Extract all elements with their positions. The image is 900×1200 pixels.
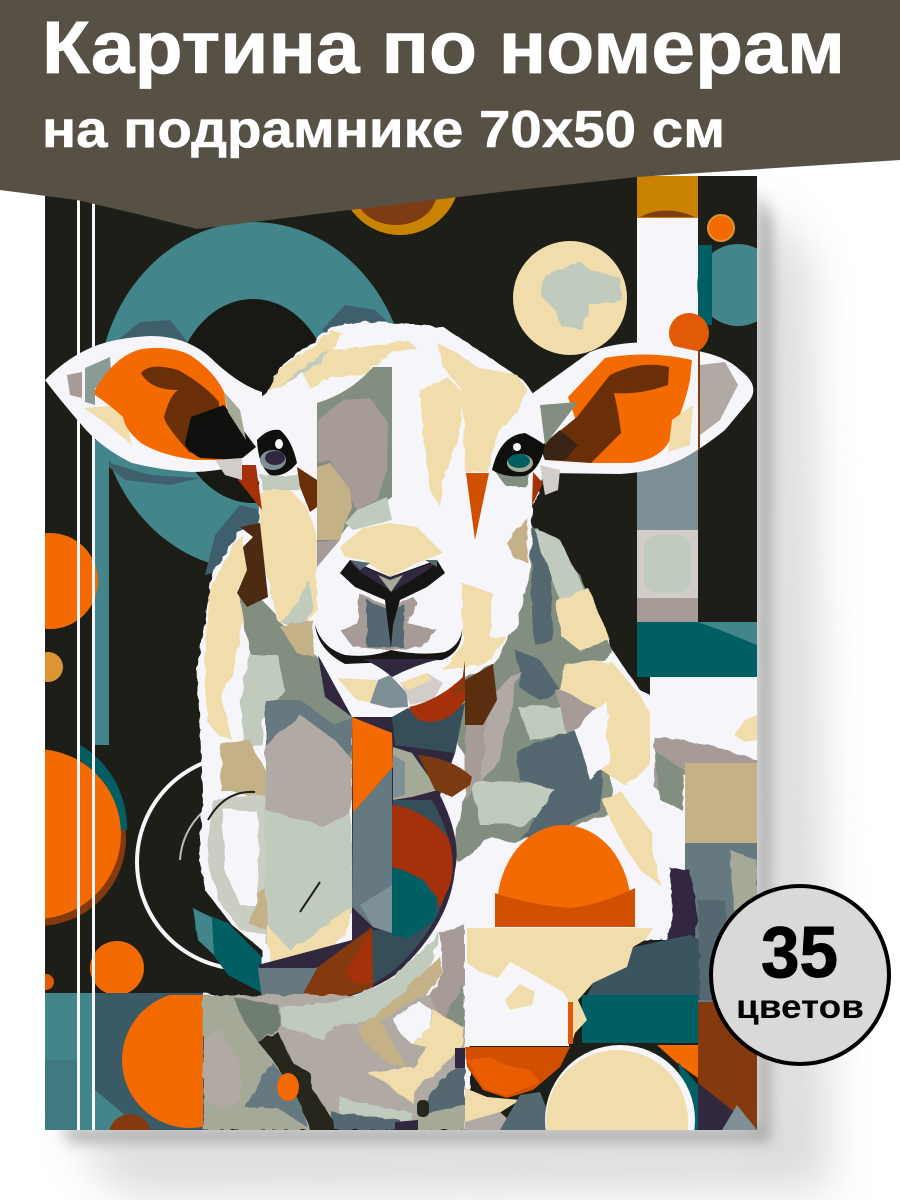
badge: 35 colours [711, 886, 889, 1064]
badge: 35 colours: цветов [736, 988, 864, 1025]
sheep head [237, 322, 545, 725]
head base [256, 320, 544, 684]
center geometric circle [258, 655, 472, 1005]
badge: 35 colours: 35 [761, 913, 838, 993]
canvas shadow [60, 190, 830, 1195]
face patches [260, 330, 530, 670]
right wool patches [452, 525, 662, 885]
right column blocks [637, 176, 757, 677]
left circles [45, 440, 144, 993]
orange egg [495, 825, 635, 927]
panel: painting [45, 176, 757, 1130]
right lower geometry [582, 677, 757, 1130]
title line 1: Картина по номерам [42, 6, 845, 89]
teal ring [98, 222, 408, 575]
red marks [238, 465, 262, 510]
right eye [492, 433, 545, 476]
orange half ellipse [465, 1047, 570, 1130]
bottom band left [45, 993, 207, 1130]
title line 2: на подрамнике 70х50 см [42, 101, 725, 159]
black squiggle [258, 1032, 335, 1130]
mouth [315, 625, 462, 677]
cream circle bottom [545, 1045, 698, 1130]
cream cup [465, 928, 653, 1046]
left eye [257, 430, 297, 476]
teal blob lower left [193, 908, 262, 993]
left ear [45, 336, 262, 480]
nose bridge cream [340, 523, 443, 577]
left cheek brown [237, 523, 268, 607]
wool white base [197, 527, 690, 1130]
sheep body wool [197, 525, 690, 1130]
white square [465, 950, 569, 1046]
top ochre circle [351, 197, 456, 235]
cream circle [513, 241, 627, 355]
eyes [257, 430, 545, 476]
header banner [0, 0, 900, 229]
left wool patches [205, 534, 352, 965]
tiny orange leaf [277, 1073, 299, 1101]
chin [337, 660, 497, 725]
small circles right [669, 214, 757, 351]
bottom wool [203, 925, 465, 1130]
muzzle grey [340, 593, 437, 650]
white ring [135, 762, 224, 970]
forehead grey strip [317, 367, 392, 567]
right ear [533, 342, 753, 495]
nose [340, 560, 445, 648]
white vertical lines [77, 195, 95, 1130]
